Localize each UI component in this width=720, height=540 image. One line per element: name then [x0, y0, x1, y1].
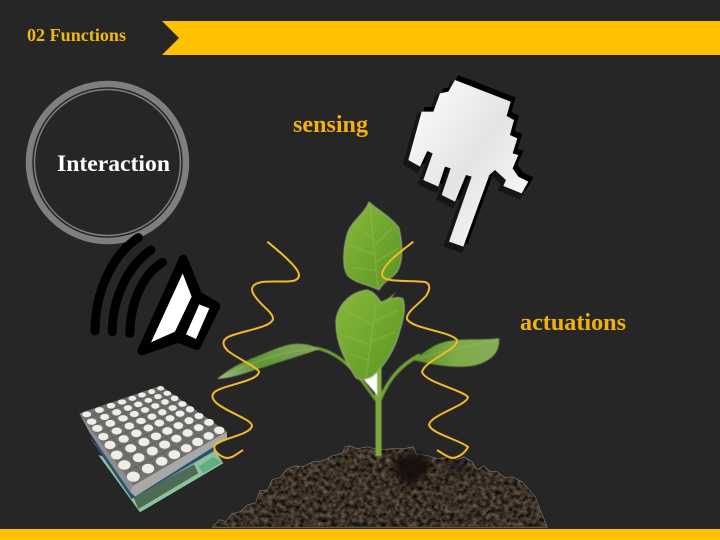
left stalk	[315, 348, 376, 400]
leaf veins	[220, 206, 497, 378]
section title: 02 Functions	[27, 25, 126, 45]
lower large leaf	[336, 290, 404, 379]
top banner ribbon	[162, 21, 720, 55]
circle badge: Interaction: Interaction	[57, 151, 170, 177]
icon: speaker with sound waves	[95, 238, 216, 351]
white gap near stem	[364, 373, 377, 395]
matrix top surface	[79, 386, 227, 486]
upper leaf	[344, 202, 402, 290]
green circuit board	[98, 448, 223, 512]
dark hollow in soil	[394, 454, 432, 487]
label: sensing: sensing	[293, 112, 368, 138]
LED matrix on circuit boards	[79, 386, 227, 512]
bottom bar	[0, 529, 720, 540]
small shoot	[379, 292, 396, 306]
plant seedling	[217, 202, 499, 456]
board connector strip	[133, 464, 198, 509]
left signal wave	[212, 242, 299, 458]
left leaf	[217, 344, 320, 379]
matrix grid lines	[89, 390, 214, 473]
right signal wave	[382, 242, 468, 458]
right leaf	[413, 338, 499, 367]
right stalk	[380, 355, 420, 400]
blue circuit board	[89, 437, 217, 499]
matrix LED dots	[83, 387, 224, 481]
stem	[376, 366, 382, 456]
soil mound	[213, 446, 547, 527]
matrix side walls	[79, 413, 227, 497]
icon: pointing hand cursor	[406, 76, 532, 250]
circle badge: Interaction	[29, 84, 186, 241]
board corner marking	[198, 457, 222, 473]
label: actuations: actuations	[520, 310, 626, 336]
